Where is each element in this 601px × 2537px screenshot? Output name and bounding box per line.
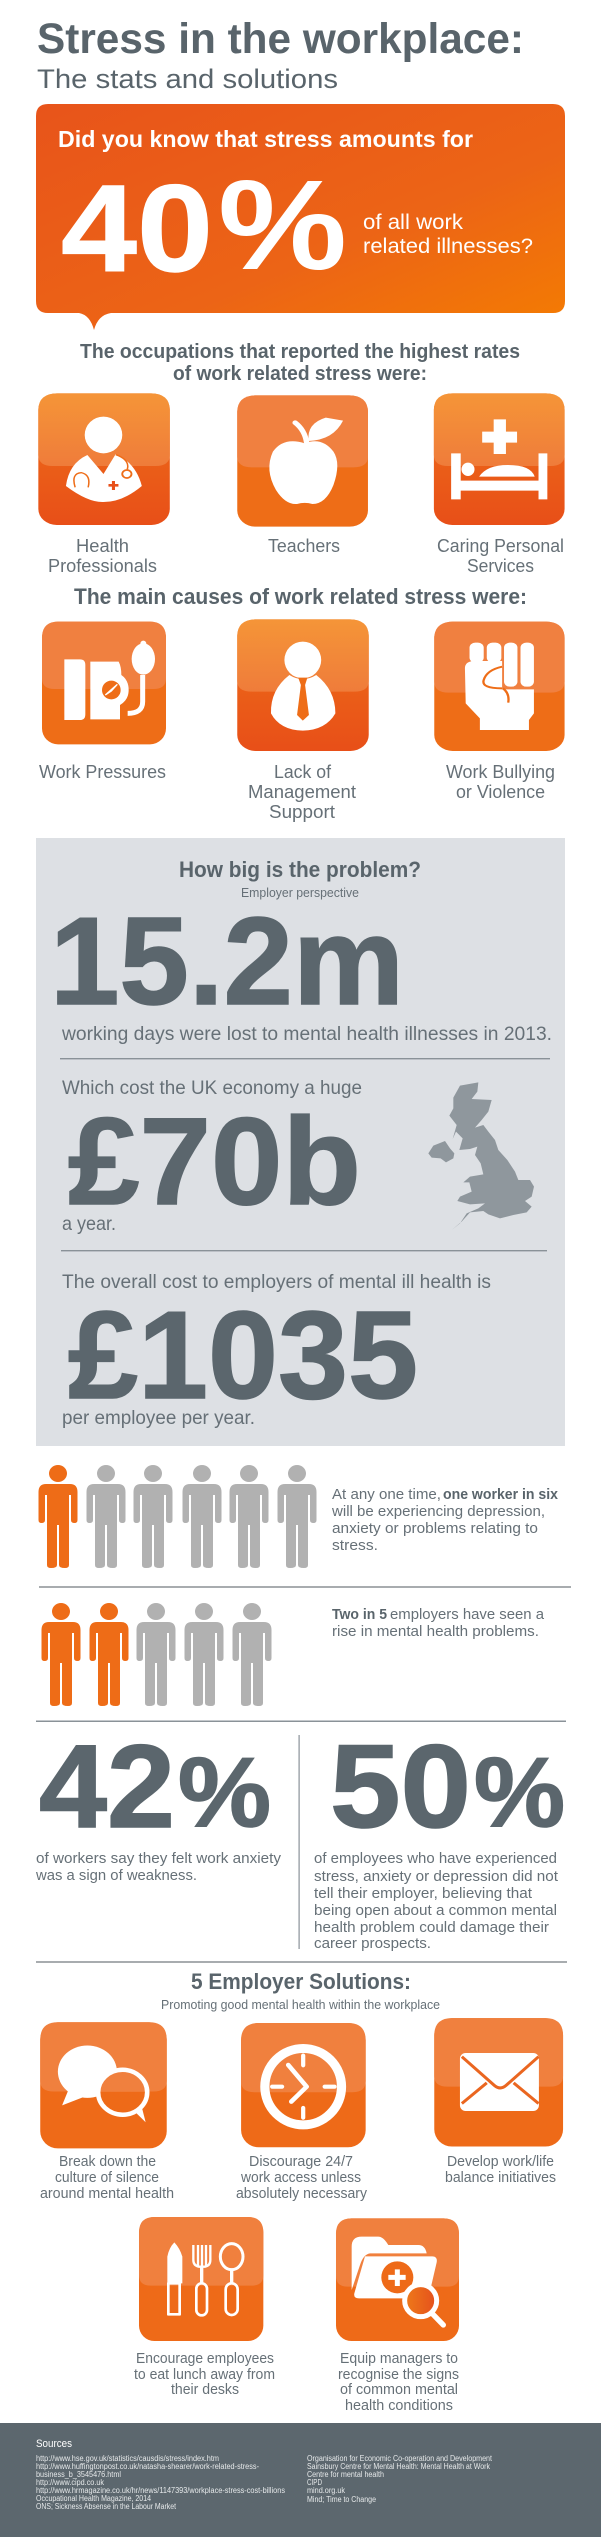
stat: £70b cost: Which cost the UK economy a huge (62, 1077, 362, 1099)
label: eat lunch away from desks (134, 2350, 275, 2398)
callout: 40% of illnesses: of all work (363, 211, 464, 234)
stat: £70b cost: £70b (68, 1093, 361, 1231)
source links: business_b_3545476.html (36, 2470, 121, 2479)
icon: envelope (434, 2018, 563, 2147)
source links: Occupational Health Magazine, 2014 (36, 2494, 151, 2503)
title: The stats and solutions (37, 64, 338, 94)
text: one worker in six (331, 1487, 558, 1554)
label: break down the culture of silence: around mental health (40, 2185, 174, 2202)
stat: £70b cost: a year. (62, 1213, 116, 1235)
stat: 50% of employees: career prospects. (314, 1936, 431, 1952)
text: one worker in six: anxiety or problems relating to (332, 1521, 538, 1537)
label: eat lunch away from desks: Encourage employees (136, 2350, 274, 2367)
icon: speech bubbles (40, 2022, 167, 2148)
source organisations: mind.org.uk (307, 2486, 346, 2495)
label: work bullying or violence (446, 762, 555, 802)
label: work pressures: Work Pressures (39, 762, 166, 782)
text: one worker in six: one worker in six (443, 1487, 558, 1503)
stat: 50% of employees: being open about a common mental (314, 1903, 557, 1919)
icon: clock (241, 2023, 366, 2147)
icon: hospital bed (434, 393, 565, 525)
label: equip managers: recognise the signs (338, 2366, 459, 2383)
title (37, 15, 524, 94)
text: two in five employers: employers have seen a (390, 1607, 545, 1623)
stat: £1035 per employee: £1035 (68, 1287, 418, 1425)
heading: main causes: The main causes of work related stress were: (74, 584, 527, 609)
callout: 40% of illnesses: related illnesses? (363, 235, 533, 258)
label: discourage 24/7 work access: work access unless (240, 2169, 361, 2186)
stat: 42% of workers: was a sign of weakness. (35, 1868, 197, 1884)
label: teachers: Teachers (268, 536, 340, 556)
heading: occupations: The occupations that reported the highest rates (80, 341, 520, 363)
label: equip managers: Equip managers to (340, 2350, 458, 2367)
source links: http://www.hrmagazine.co.uk/hr/news/1147393/workplace-stress-cost-billions (36, 2486, 285, 2495)
text: two in five employers: rise in mental health problems. (332, 1624, 539, 1640)
source links: ONS; Sickness Absense in the Labour Market (36, 2502, 177, 2511)
label: caring personal services: Services (467, 556, 534, 576)
source organisations: Organisation for Economic Co-operation and Development (307, 2454, 493, 2463)
text: one worker in six: stress. (332, 1538, 378, 1554)
label: develop work/life balance (445, 2153, 556, 2186)
callout: 40% of illnesses: % (218, 154, 347, 297)
label: discourage 24/7 work access: Discourage 24/7 (249, 2153, 353, 2170)
label: caring personal services: Caring Personal (437, 536, 564, 556)
source organisations: CIPD (307, 2478, 322, 2487)
label: equip managers (338, 2350, 459, 2414)
heading: employer solutions: 5 Employer Solutions: (191, 1969, 411, 1994)
panel heading: Employer perspective (241, 886, 359, 900)
icon: medical folder with magnifier (336, 2218, 459, 2341)
heading: occupations: of work related stress were: (173, 363, 427, 385)
stat: 42% of workers: of workers say they felt work anxiety (36, 1851, 282, 1867)
icon: UK map (428, 1082, 534, 1230)
stat: 42% of workers: % (178, 1737, 271, 1847)
label: lack of management support: Lack of (274, 762, 332, 782)
stat: 50% of employees: tell their employer, believing that (314, 1886, 532, 1902)
source organisations (307, 2454, 493, 2504)
stat: 42% of workers (35, 1721, 282, 1884)
label: work bullying or violence: or Violence (456, 782, 545, 802)
label: health professionals: Health (76, 536, 129, 556)
panel: how big is the problem (36, 838, 565, 1446)
label: health professionals (48, 536, 157, 576)
text: two in five employers (332, 1607, 545, 1640)
footer: sources: Sources (36, 2438, 72, 2450)
source links: http://www.huffingtonpost.co.uk/natasha-shearer/work-related-stress- (36, 2462, 259, 2471)
text: one worker in six: At any one time, (332, 1487, 441, 1503)
label: discourage 24/7 work access: absolutely necessary (236, 2185, 367, 2202)
label: equip managers: health conditions (345, 2397, 453, 2414)
icon: apple (237, 395, 368, 527)
label: lack of management support: Support (269, 802, 335, 822)
callout: 40% of illnesses: 40 (61, 160, 213, 298)
stat: 50% of employees: % (474, 1737, 565, 1847)
source organisations: Sainsbury Centre for Mental Health: Mental Health at Work (307, 2462, 491, 2471)
footer: sources (0, 2423, 601, 2537)
title: Stress in the workplace: (37, 15, 524, 63)
solutions icons and labels (40, 2018, 563, 2414)
label: develop work/life balance: Develop work/life (447, 2153, 554, 2170)
pictogram: two in five (42, 1603, 272, 1706)
label: break down the culture of silence: culture of silence (55, 2169, 159, 2186)
heading: occupations (80, 341, 520, 385)
panel heading (179, 857, 421, 900)
panel heading: How big is the problem? (179, 857, 421, 882)
icon: blood pressure monitor (42, 622, 166, 744)
icon: health professional (38, 393, 170, 525)
label: eat lunch away from desks: their desks (171, 2381, 239, 2398)
label: health professionals: Professionals (48, 556, 157, 576)
source links: http://www.hse.gov.uk/statistics/causdis/stress/index.htm (36, 2454, 219, 2463)
heading: employer solutions: Promoting good mental health within the workplace (161, 1997, 440, 2012)
occupations row (38, 393, 565, 576)
icon: manager with tie (237, 619, 369, 751)
label: eat lunch away from desks: to eat lunch away from (134, 2366, 275, 2383)
icon: cutlery (139, 2217, 263, 2341)
source organisations: Mind; Time to Change (307, 2495, 376, 2504)
stat: 42% of workers: 42 (39, 1721, 175, 1853)
text: one worker in six: will be experiencing depression, (331, 1504, 545, 1520)
stat: 15.2m days lost: 15.2m (50, 893, 404, 1031)
causes row (39, 619, 565, 822)
source links: http://www.cipd.co.uk (36, 2478, 105, 2487)
stat: 50% of employees: health problem could damage their (314, 1920, 549, 1936)
heading: employer solutions (161, 1969, 440, 2012)
label: break down the culture of silence (40, 2153, 174, 2202)
stat: 50% of employees: 50 (330, 1721, 471, 1853)
text: two in five employers: Two in 5 (332, 1607, 387, 1623)
label: caring personal services (437, 536, 564, 576)
icon: raised fist (434, 622, 565, 751)
stat: 15.2m days lost (50, 893, 552, 1045)
label: lack of management support: Management (248, 782, 356, 802)
label: break down the culture of silence: Break down the (59, 2153, 156, 2170)
stat: £1035 per employee: per employee per year. (62, 1407, 255, 1429)
stat: £1035 per employee: The overall cost to employers of mental ill health is (62, 1271, 491, 1293)
stat: 50% of employees: of employees who have experienced (314, 1851, 557, 1867)
label: equip managers: of common mental (340, 2381, 458, 2398)
stat: 50% of employees (314, 1721, 565, 1952)
source organisations: Centre for mental health (307, 2470, 384, 2479)
label: develop work/life balance: balance initiatives (445, 2169, 556, 2186)
callout: 40% of illnesses (36, 104, 565, 330)
pictogram: one in six (38, 1465, 316, 1568)
stat: 15.2m days lost: working days were lost to mental health illnesses in 2013. (61, 1023, 552, 1045)
label: discourage 24/7 work access (236, 2153, 367, 2202)
source links (36, 2454, 285, 2511)
callout: 40% of illnesses: Did you know that stress amounts for (58, 126, 473, 152)
label: lack of management support (248, 762, 356, 822)
label: work bullying or violence: Work Bullying (446, 762, 555, 782)
stat: 50% of employees: stress, anxiety or depression did not (314, 1869, 558, 1885)
